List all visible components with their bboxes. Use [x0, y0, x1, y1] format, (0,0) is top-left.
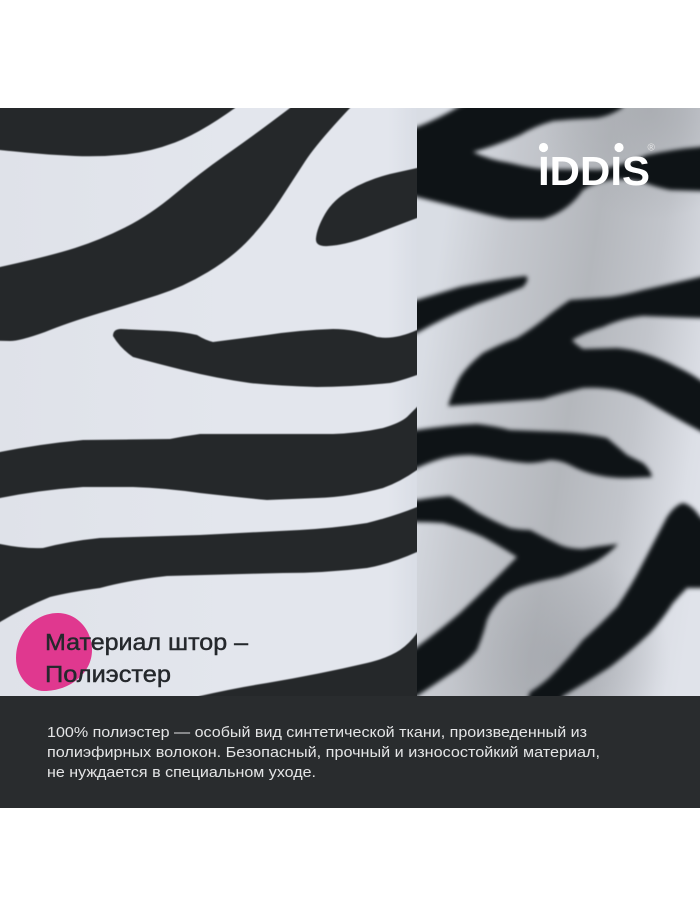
- text block: material description: не нуждается в специальном уходе.: [47, 764, 316, 781]
- panel: rear curtain fold with blurred zebra print: [417, 108, 700, 696]
- heading: material of curtains: Материал штор –: [45, 629, 249, 655]
- icon: pink blob accent: [16, 613, 92, 691]
- heading: material of curtains: [45, 629, 249, 687]
- text block: material description: [47, 724, 600, 781]
- heading: material of curtains: Полиэстер: [45, 661, 171, 687]
- panel: curtain photo: [0, 80, 700, 730]
- panel: description band: [0, 696, 700, 808]
- logo: IDDIS: ®: [648, 142, 656, 154]
- text block: material description: полиэфирных волокон. Безопасный, прочный и износостойкий материал,: [47, 744, 600, 761]
- text block: material description: 100% полиэстер — особый вид синтетической ткани, произведенный из: [47, 724, 587, 741]
- panel: front curtain fold with sharp zebra print: [0, 108, 417, 696]
- logo: IDDIS: IDDIS: [538, 148, 650, 194]
